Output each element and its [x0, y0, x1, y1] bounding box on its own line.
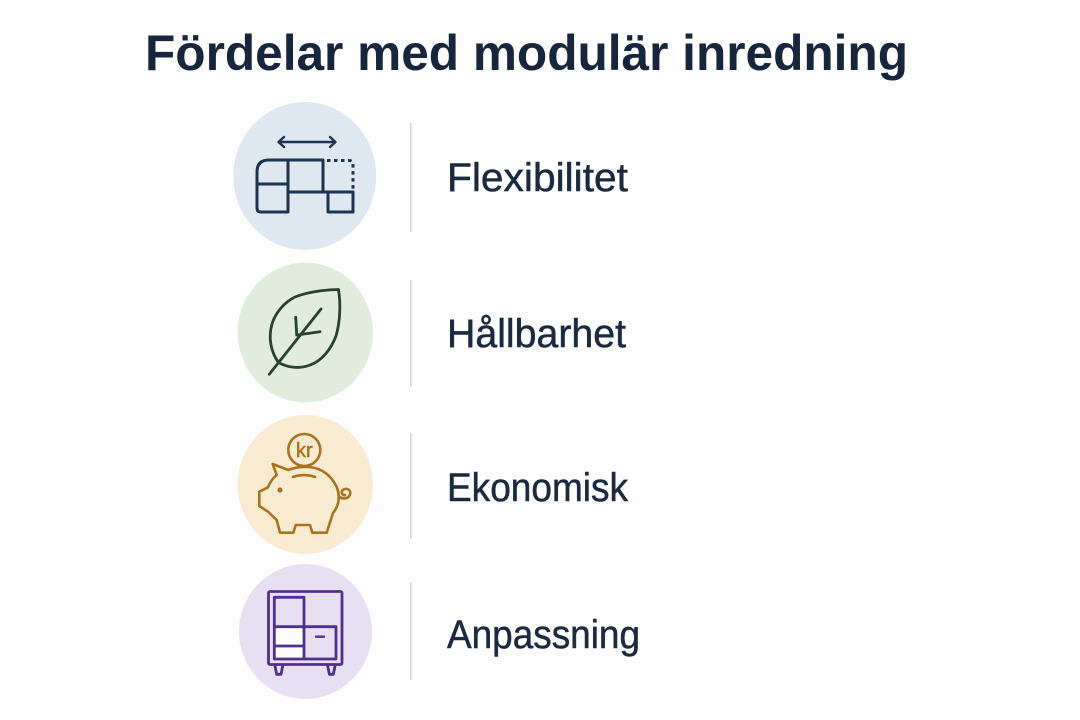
- icon: modular sofa with arrow: [233, 102, 376, 250]
- row: Hållbarhet: [238, 262, 626, 402]
- coin symbol: kr: [296, 440, 313, 462]
- title: Fördelar med modulär inredning: [145, 25, 908, 81]
- row: Anpassning: [239, 564, 640, 699]
- label: Flexibilitet: Flexibilitet: [447, 156, 628, 200]
- icon: piggy bank with coin: [238, 415, 373, 554]
- label: Ekonomisk: Ekonomisk: [447, 466, 629, 510]
- label: Anpassning: Anpassning: [447, 613, 640, 657]
- icon: leaf: [238, 262, 373, 402]
- label: Hållbarhet: Hållbarhet: [447, 312, 626, 356]
- icon: modular cabinet: [239, 564, 372, 699]
- row: Ekonomisk: [238, 415, 629, 554]
- row: Flexibilitet: [233, 102, 628, 250]
